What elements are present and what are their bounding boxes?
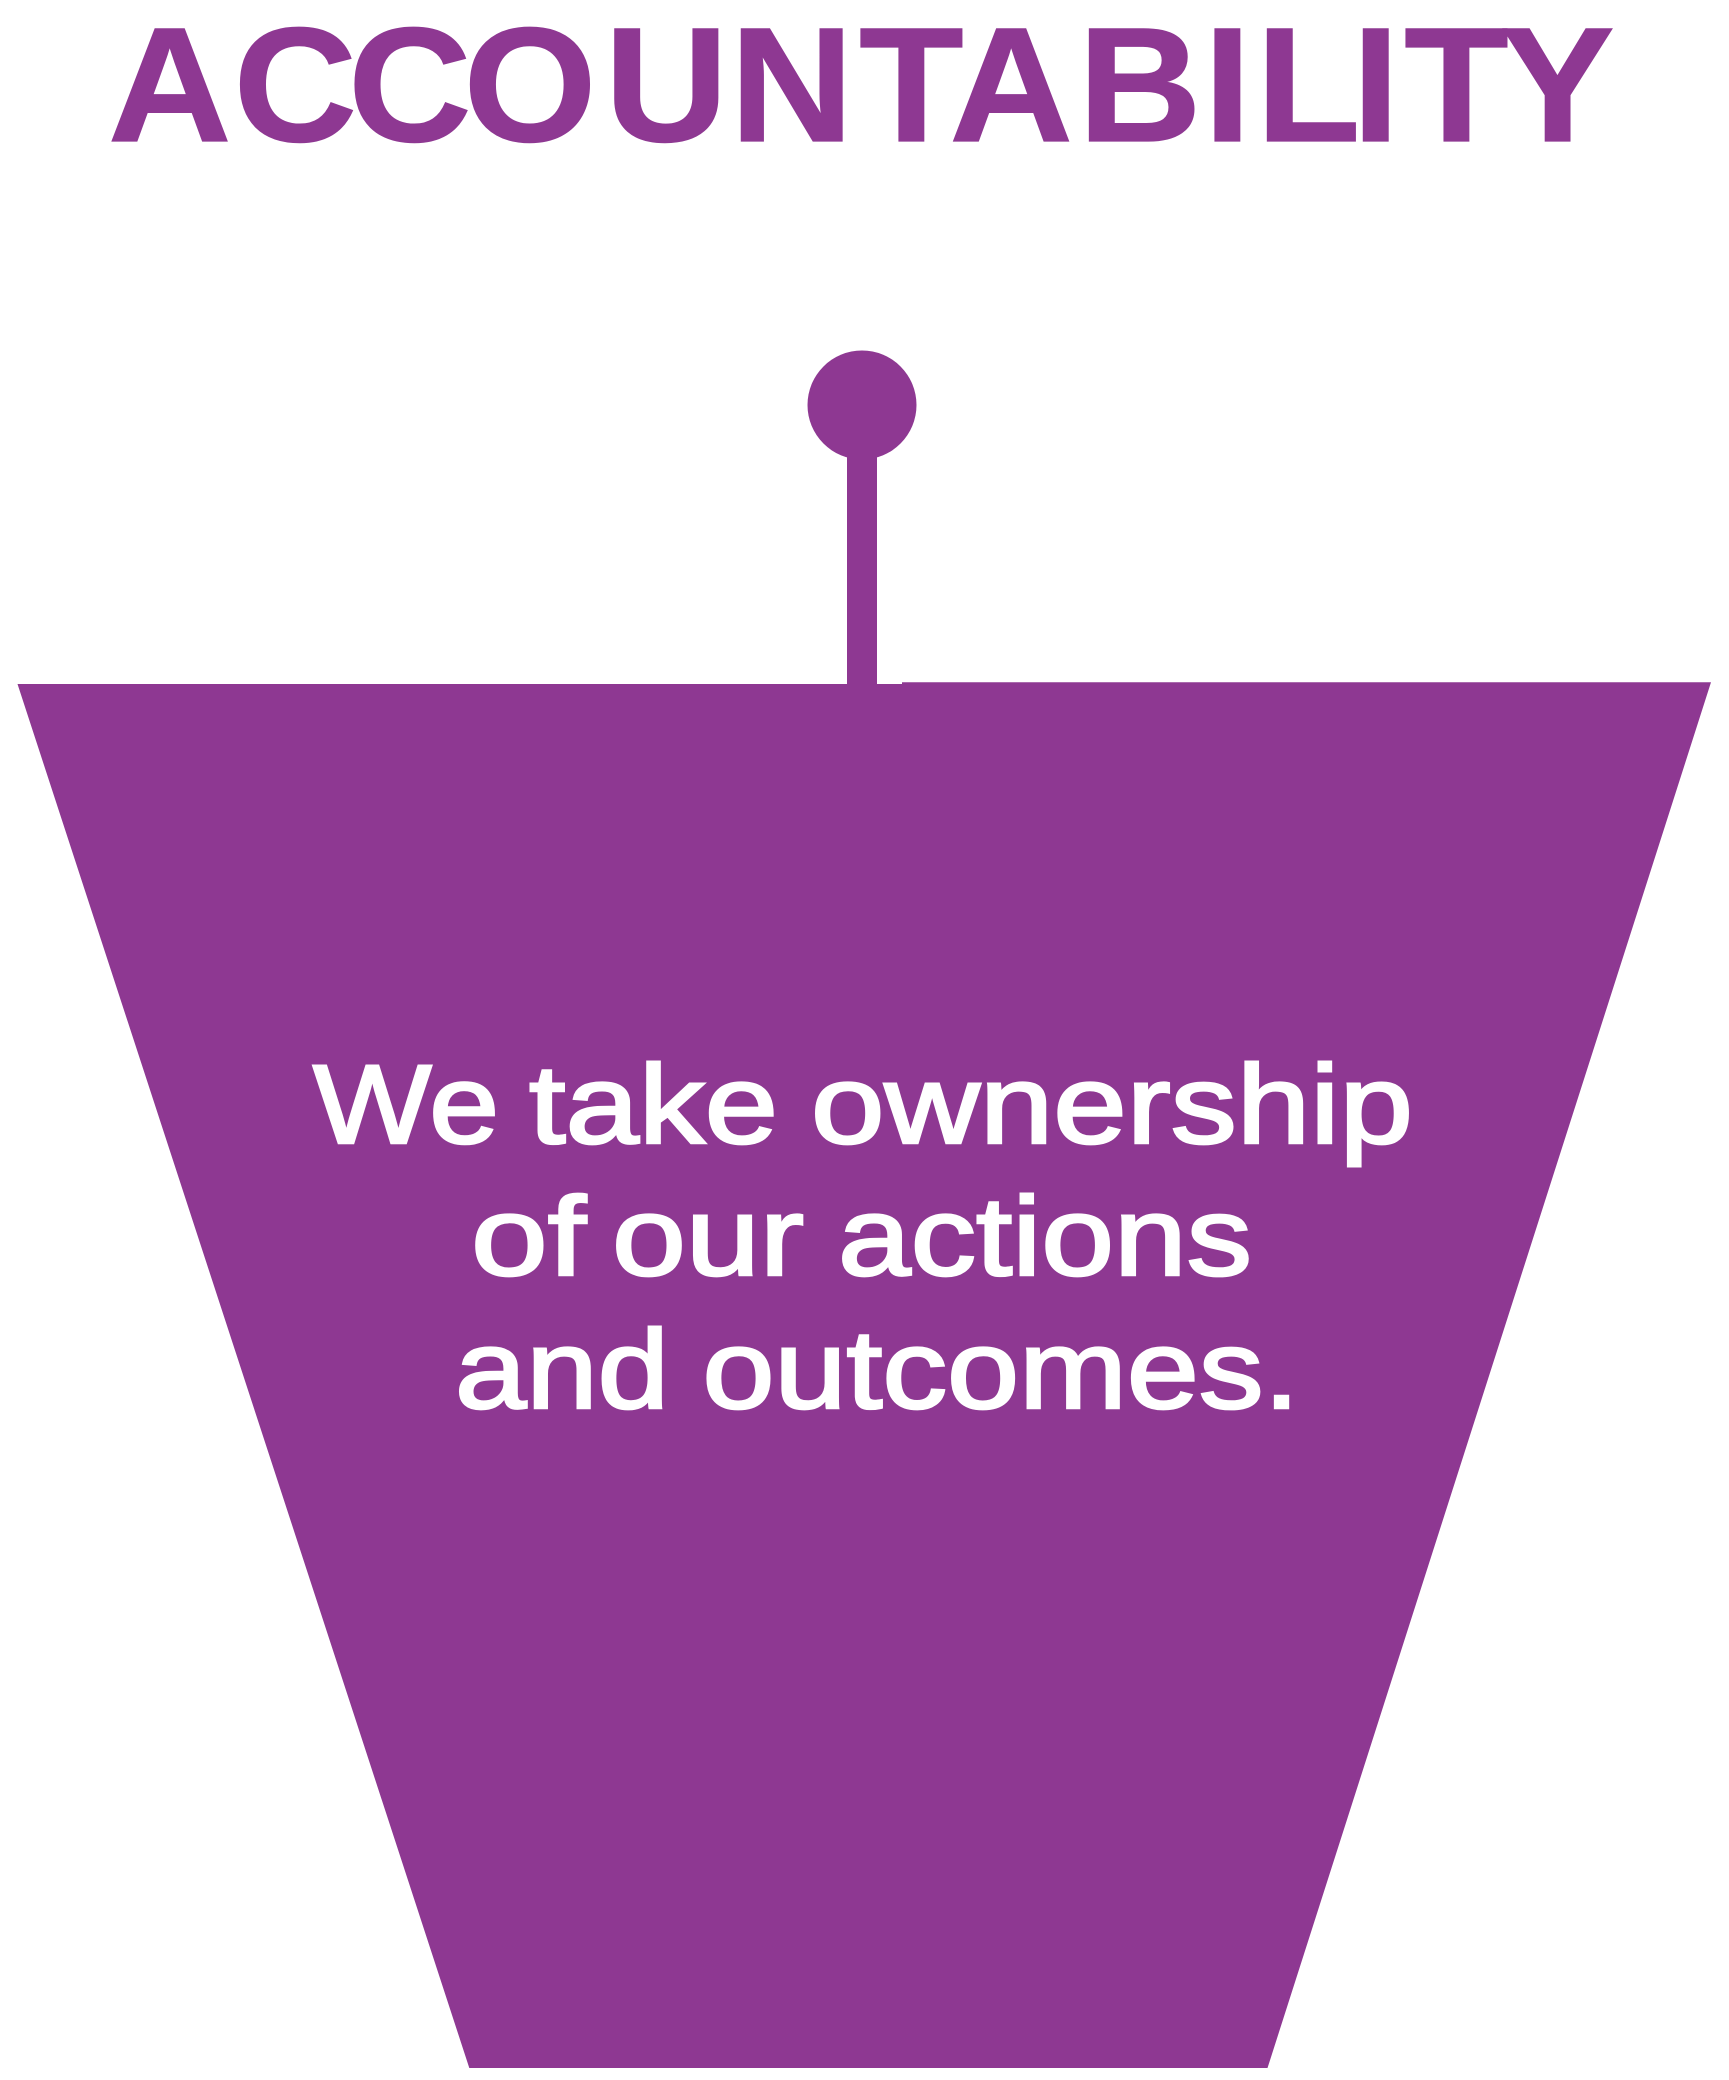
text block: accountability statement: of [471, 1174, 587, 1299]
text block: accountability statement: We [313, 1042, 499, 1167]
title: ACCOUNTABILITY [108, 0, 1615, 176]
text block: accountability statement [313, 1042, 1413, 1432]
text block: accountability statement: outcomes. [702, 1307, 1300, 1432]
icon: podium microphone [808, 350, 916, 690]
panel: podium body [18, 682, 1711, 2068]
text block: accountability statement: ownership [811, 1042, 1413, 1167]
text block: accountability statement: and [455, 1307, 669, 1432]
text block: accountability statement: take [529, 1042, 778, 1167]
text block: accountability statement: our [612, 1174, 804, 1299]
text block: accountability statement: actions [838, 1174, 1252, 1299]
